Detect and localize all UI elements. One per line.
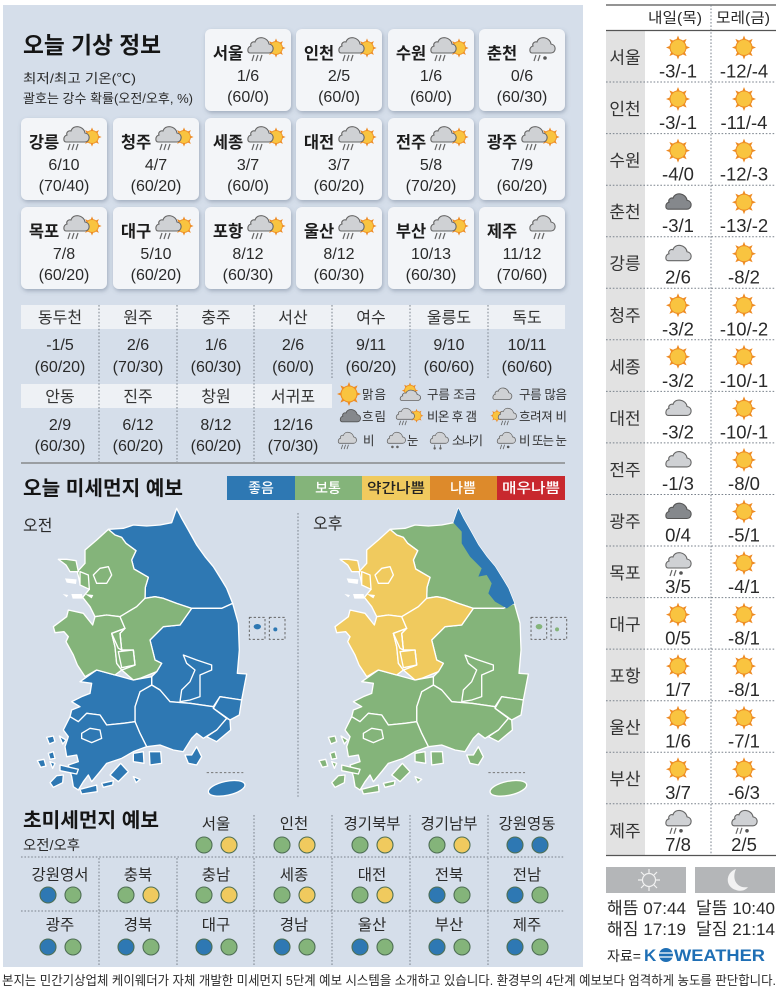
card: 대구: (60/20): [131, 267, 181, 284]
card: 울산: (60/30): [314, 267, 364, 284]
city: 독도: 독도: [512, 310, 542, 327]
row: 인천: 인천: [609, 100, 641, 119]
text: sun and moon times: [607, 899, 775, 939]
card: 포항: 8/12: [232, 246, 264, 263]
divider: morning / afternoon: [297, 513, 299, 797]
panel: ultrafine dust grid: 경기남부: [420, 815, 478, 833]
row: 춘천: -13/-2: [720, 215, 768, 236]
row: 대전: -3/2: [662, 421, 694, 442]
card: 광주: 광주: [487, 133, 517, 152]
card: 춘천: 0/6: [511, 68, 533, 85]
city: 안동: 2/9: [49, 417, 71, 434]
card: 세종: (60/0): [227, 178, 269, 195]
panel: two-day forecast table: [606, 5, 776, 856]
panel: ultrafine dust grid: 충북: [124, 866, 152, 884]
city: 독도: (60/60): [502, 359, 552, 376]
panel: ultrafine dust grid: 대구: [202, 916, 230, 934]
row: 광주: 광주: [609, 512, 641, 532]
row: 청주: [609, 293, 768, 339]
legend: fine dust levels: 보통: [315, 480, 341, 496]
legend: fine dust levels: 매우나쁨: [502, 480, 560, 496]
card: 인천: (60/0): [318, 89, 360, 106]
city: 여수: 여수: [356, 309, 386, 327]
city: 서귀포: 12/16: [273, 417, 313, 434]
row: 포항: -8/1: [728, 679, 760, 700]
card: 부산: (60/30): [406, 267, 456, 284]
card: 전주: (70/20): [406, 178, 456, 195]
row: 인천: [609, 87, 767, 133]
label: afternoon: 오후: [313, 515, 342, 533]
city: 원주: 2/6: [127, 337, 149, 354]
card: 목포: (60/20): [39, 267, 89, 284]
row: 대전: [609, 396, 768, 442]
text: sun and moon times: 해뜸 07:44: [607, 899, 686, 918]
row: 부산: 3/7: [665, 782, 691, 803]
city: 충주: [191, 309, 241, 376]
panel: ultrafine dust grid: 대전: [358, 866, 386, 884]
card: 포항: (60/30): [223, 267, 273, 284]
card: 목포: [21, 207, 107, 289]
card: 광주: 7/9: [511, 157, 533, 174]
row: 청주: -3/2: [662, 318, 694, 339]
panel: ultrafine dust grid: 전북: [435, 866, 463, 884]
row: 대구: -8/1: [728, 628, 760, 649]
panel: ultrafine dust grid: 인천: [280, 815, 308, 833]
row: 목포: 3/5: [665, 576, 691, 597]
row: 제주: 제주: [609, 822, 641, 841]
city: 울릉도: [424, 309, 474, 376]
row: 서울: -3/-1: [659, 60, 697, 82]
row: 강릉: 2/6: [665, 267, 691, 288]
city: 원주: (70/30): [113, 359, 163, 376]
row: 광주: 0/4: [665, 524, 691, 546]
card: 제주: [479, 207, 565, 289]
card: 포항: 포항: [213, 222, 243, 241]
city: 울릉도: (60/60): [424, 359, 474, 376]
city: 서귀포: 서귀포: [271, 388, 315, 406]
panel: ultrafine dust grid: 강원영동: [498, 815, 556, 833]
card: 제주: 제주: [487, 222, 517, 241]
row: 인천: -3/-1: [659, 112, 697, 133]
row: 강릉: [609, 242, 760, 288]
card: 춘천: [479, 29, 565, 111]
city: 울릉도: 울릉도: [427, 309, 471, 327]
city: 동두천: [35, 309, 85, 376]
card: 대전: [296, 118, 382, 200]
panel: ultrafine dust grid: 세종: [280, 866, 308, 884]
card: 울산: 8/12: [323, 246, 355, 263]
row: 춘천: -3/1: [662, 215, 694, 236]
label: morning: 오전: [23, 517, 52, 535]
city: 원주: [113, 309, 163, 376]
icon: moon box: [695, 867, 775, 893]
card: 세종: 3/7: [237, 157, 259, 174]
row: 울산: 울산: [609, 719, 641, 738]
city: 충주: 1/6: [205, 337, 227, 354]
legend: weather icons: 눈: [407, 434, 419, 448]
panel: ultrafine dust grid: 광주: [46, 916, 74, 934]
card: 청주: 4/7: [145, 157, 167, 174]
row: 부산: -6/3: [728, 782, 760, 803]
source: KWEATHER: WEATHER: [674, 946, 765, 965]
city: 충주: (60/30): [191, 359, 241, 376]
card: 전주: [388, 118, 474, 200]
row: 부산: [609, 757, 760, 803]
text block: units note: [23, 71, 193, 106]
panel: other cities table: [21, 305, 565, 463]
panel: ultrafine dust grid: 서울: [202, 815, 230, 833]
row: 서울: -12/-4: [720, 60, 768, 82]
city: 울릉도: 9/10: [433, 337, 465, 354]
city: 창원: [191, 388, 241, 455]
city: 진주: 진주: [123, 388, 153, 406]
row: 울산: -7/1: [728, 731, 760, 752]
row: 포항: 1/7: [665, 679, 691, 700]
card: 청주: (60/20): [131, 178, 181, 195]
panel: ultrafine dust grid: 경북: [124, 916, 152, 934]
legend: weather icons: 비 또는 눈: [519, 434, 567, 448]
city: 서산: 2/6: [282, 337, 304, 354]
card: 서울: [205, 29, 291, 111]
city: 진주: (60/20): [113, 438, 163, 455]
card: 목포: 목포: [29, 223, 59, 241]
card: 춘천: 춘천: [487, 44, 517, 63]
legend: fine dust levels: 약간나쁨: [367, 480, 425, 496]
city: 서귀포: (70/30): [268, 438, 318, 455]
card: 대구: 대구: [121, 222, 151, 241]
card: 수원: 1/6: [420, 68, 442, 85]
header: tomorrow: 내일(목): [648, 10, 702, 27]
legend: weather icons: [337, 382, 567, 450]
row: 서울: [609, 36, 768, 82]
row: 세종: -10/-1: [720, 370, 768, 391]
panel: ultrafine dust grid: 강원영서: [31, 866, 89, 884]
card: 강릉: (70/40): [39, 178, 89, 195]
row: 강릉: -8/2: [728, 267, 760, 288]
city: 진주: 6/12: [122, 417, 154, 434]
card: 부산: [388, 207, 474, 289]
row: 서울: 서울: [609, 48, 641, 68]
card: 서울: (60/0): [227, 89, 269, 106]
panel: ultrafine dust grid: 제주: [513, 916, 541, 934]
card: 광주: (60/20): [497, 178, 547, 195]
card: 대전: 대전: [304, 133, 334, 152]
row: 청주: -10/-2: [720, 318, 768, 339]
row: 제주: 7/8: [665, 834, 691, 855]
row: 세종: -3/2: [662, 370, 694, 391]
heading: fine dust forecast: 오늘 미세먼지 예보: [23, 477, 183, 500]
source: KWEATHER: K: [644, 946, 657, 965]
card: 수원: (60/0): [410, 89, 452, 106]
row: 수원: -12/-3: [720, 164, 768, 185]
panel: ultrafine dust grid: 경기북부: [343, 815, 401, 833]
legend: fine dust levels: 좋음: [248, 480, 274, 496]
card: 세종: 세종: [213, 133, 243, 152]
card: 강릉: 6/10: [48, 157, 80, 174]
row: 대구: 대구: [609, 616, 641, 635]
row: 광주: -5/1: [728, 524, 760, 546]
row: 수원: [609, 139, 768, 185]
row: 대구: 0/5: [665, 628, 691, 649]
row: 전주: 전주: [609, 461, 641, 480]
city: 여수: (60/20): [346, 359, 396, 376]
panel: ultrafine dust grid: 부산: [435, 916, 463, 934]
city: 동두천: 동두천: [38, 309, 82, 327]
city: 진주: [113, 388, 163, 455]
row: 수원: -4/0: [662, 164, 694, 185]
row: 광주: [609, 500, 760, 546]
panel: ultrafine dust grid: 충남: [202, 866, 230, 884]
row: 수원: 수원: [609, 152, 641, 171]
row: 대전: -10/-1: [720, 421, 768, 442]
row: 부산: 부산: [609, 770, 641, 789]
card: 울산: 울산: [304, 222, 334, 241]
row: 울산: [609, 706, 760, 752]
row: 세종: 세종: [609, 358, 641, 377]
row: 인천: -11/-4: [721, 112, 767, 133]
row: 포항: [609, 654, 760, 700]
legend: weather icons: 비온 후 갬: [427, 410, 477, 424]
legend: fine dust levels: 나쁨: [450, 480, 476, 496]
city: 서산: 서산: [278, 309, 308, 327]
text: sun and moon times: 해짐 17:19: [607, 920, 686, 939]
legend: weather icons: 흐림: [362, 410, 386, 424]
card: 강릉: [21, 118, 107, 200]
card: 부산: 부산: [396, 222, 426, 241]
row: 목포: 목포: [609, 564, 641, 583]
row: 목포: -4/1: [728, 576, 760, 597]
card: 청주: [113, 118, 199, 200]
city: 여수: 9/11: [356, 337, 386, 354]
text block: units note: 괄호는 강수 확률(오전/오후, %): [23, 91, 193, 106]
panel: ultrafine dust grid: 울산: [358, 916, 386, 934]
card: 광주: [479, 118, 565, 200]
row: 춘천: [609, 190, 768, 236]
card: 대구: [113, 207, 199, 289]
panel: ultrafine dust grid: [21, 815, 565, 965]
city: 서산: (60/0): [272, 359, 314, 376]
legend: weather icons: 구름 많음: [519, 388, 567, 402]
map: morning fine dust: [37, 508, 285, 799]
source: KWEATHER: 자료=: [607, 948, 641, 964]
row: 울산: 1/6: [665, 731, 691, 752]
text: sun and moon times: 달짐 21:14: [696, 920, 775, 939]
row: 제주: [609, 810, 757, 855]
card: 세종: [205, 118, 291, 200]
panel: ultrafine dust grid: 경남: [280, 916, 308, 934]
card: 춘천: (60/30): [497, 89, 547, 106]
city: 창원: 창원: [201, 388, 231, 406]
icon: sun box: [606, 867, 686, 893]
legend: weather icons: 맑음: [362, 388, 386, 402]
card: 강릉: 강릉: [29, 133, 59, 152]
heading: ultrafine dust forecast: 초미세먼지 예보: [23, 809, 159, 832]
row: 전주: -1/3: [662, 473, 694, 494]
text: morning / afternoon note: 오전/오후: [23, 837, 80, 853]
city: 원주: 원주: [123, 309, 153, 327]
row: 전주: -8/0: [728, 473, 760, 494]
row: 세종: [609, 345, 768, 391]
legend: weather icons: 소나기: [452, 434, 483, 448]
card: 인천: 인천: [304, 44, 334, 63]
city: 독도: [502, 310, 552, 376]
city: 서산: [272, 309, 314, 376]
card: 인천: [296, 29, 382, 111]
city: 안동: (60/30): [35, 438, 85, 455]
row: 대전: 대전: [609, 409, 641, 428]
city: 안동: 안동: [45, 388, 75, 406]
card: 서울: 서울: [213, 44, 243, 63]
legend: fine dust levels: [227, 476, 565, 500]
city: 동두천: -1/5: [46, 337, 74, 354]
row: 대구: [609, 603, 760, 649]
card: 대전: 3/7: [328, 157, 350, 174]
card: 울산: [296, 207, 382, 289]
text: sun and moon times: 달뜸 10:40: [696, 899, 775, 918]
card: 목포: 7/8: [53, 246, 75, 263]
city: 여수: [346, 309, 396, 376]
card: 포항: [205, 207, 291, 289]
card: 부산: 10/13: [411, 246, 451, 263]
card: 청주: 청주: [121, 133, 151, 152]
card: 수원: [388, 29, 474, 111]
city: 안동: [35, 388, 85, 455]
card: 서울: 1/6: [237, 68, 259, 85]
city: 독도: 10/11: [508, 337, 547, 354]
legend: weather icons: 구름 조금: [427, 388, 476, 402]
card: 제주: (70/60): [497, 267, 547, 284]
card: 전주: 전주: [396, 133, 426, 152]
row: 전주: [609, 448, 760, 494]
card: 전주: 5/8: [420, 157, 442, 174]
row: 춘천: 춘천: [609, 203, 641, 222]
city: 창원: 8/12: [200, 417, 232, 434]
map: afternoon fine dust: [319, 508, 567, 799]
card: 제주: 11/12: [503, 246, 542, 263]
legend: weather icons: 비: [363, 434, 375, 448]
city: 동두천: (60/20): [35, 359, 85, 376]
text block: units note: 최저/최고 기온(℃): [23, 71, 136, 86]
row: 강릉: 강릉: [609, 255, 641, 274]
row: 목포: [609, 551, 760, 597]
title: today's weather: 오늘 기상 정보: [23, 32, 161, 58]
panel: today's weather background: [3, 5, 583, 967]
row: 제주: 2/5: [731, 834, 757, 855]
row: 청주: 청주: [609, 306, 641, 325]
city: 서귀포: [268, 388, 318, 455]
city: 창원: (60/20): [191, 438, 241, 455]
row: 포항: 포항: [609, 667, 641, 686]
legend: weather icons: 흐려져 비: [519, 410, 567, 424]
header: day after tomorrow: 모레(금): [716, 10, 770, 27]
panel: ultrafine dust grid: 전남: [513, 866, 541, 884]
card: 대전: (60/20): [314, 178, 364, 195]
card: 수원: 수원: [396, 44, 426, 63]
panel: city cards: [21, 29, 565, 289]
source: KWEATHER: [607, 946, 765, 965]
card: 인천: 2/5: [328, 68, 350, 85]
card: 대구: 5/10: [140, 246, 172, 263]
city: 충주: 충주: [201, 309, 231, 327]
